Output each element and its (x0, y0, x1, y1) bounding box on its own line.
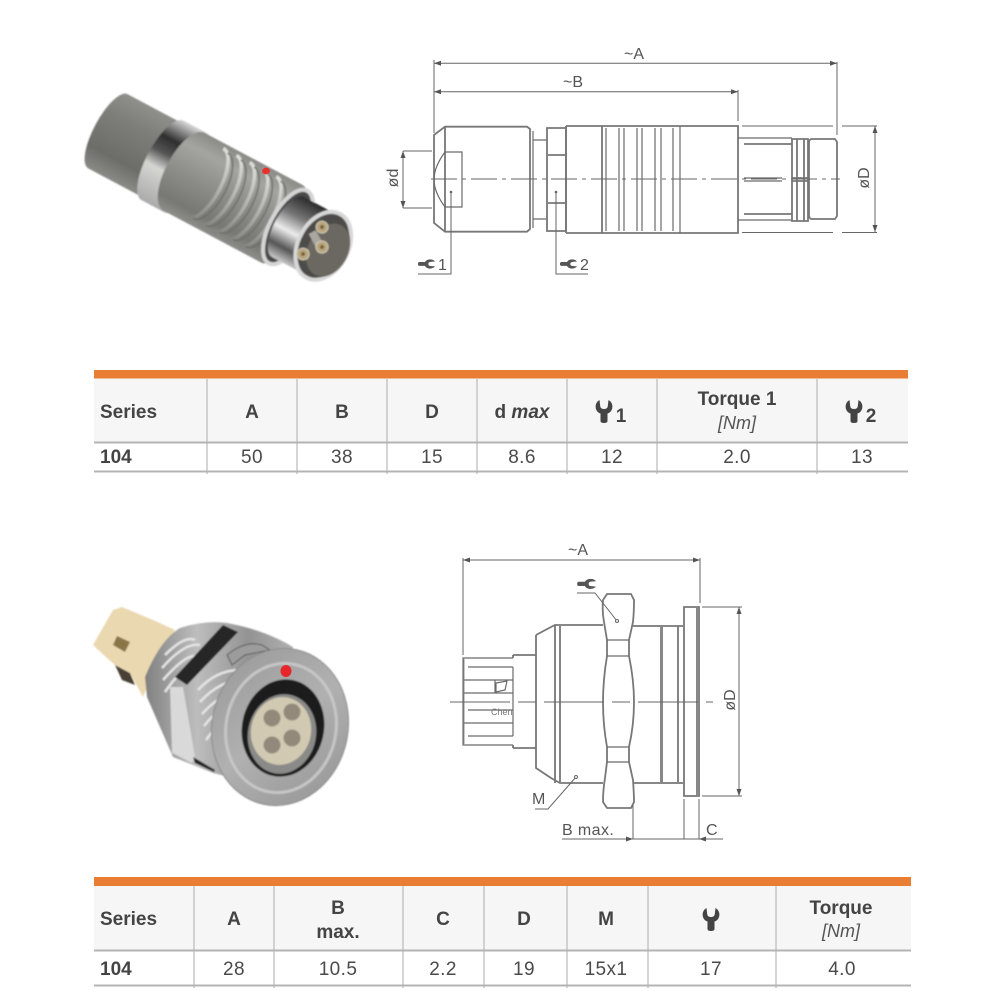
table 2 headers: B (331, 898, 345, 919)
table 2 values: 10.5 (319, 959, 357, 980)
dimension D (702, 607, 742, 796)
table 1 values: 104 (100, 447, 132, 468)
table 2 headers: A (227, 909, 241, 930)
front flange (197, 636, 363, 818)
table 1 headers: [Nm] (717, 413, 757, 433)
table 1 values: 12 (601, 447, 623, 468)
chrome neck (260, 190, 339, 276)
technical drawing: plug (385, 46, 878, 274)
front sleeve outline (434, 127, 530, 232)
lock slot (227, 644, 270, 665)
collet flat (434, 152, 462, 207)
dimension d (385, 151, 432, 208)
table 2 headers: Series (100, 909, 157, 930)
table 1 (94, 370, 908, 474)
cone (536, 625, 603, 783)
table 1 headers: d max (495, 402, 551, 423)
flange bevel (214, 653, 348, 803)
technical drawing: receptacle (450, 542, 742, 842)
table 2 headers (100, 898, 872, 943)
wrench callout (577, 579, 618, 622)
dimension D: øD (856, 167, 873, 189)
red index dot (262, 168, 270, 174)
neck (533, 131, 547, 228)
table 1 headers: B (335, 402, 349, 423)
table 1 headers: 2 (866, 406, 876, 427)
wrench callout 1: 1 (438, 257, 447, 274)
table 2 headers: Torque (810, 898, 872, 919)
table 1 values: 13 (851, 447, 873, 468)
dimension D (742, 126, 878, 232)
table 1 header background (94, 378, 908, 442)
table 2 values: 17 (700, 959, 722, 980)
flange (684, 607, 699, 796)
wrench callout 2: 2 (580, 257, 589, 274)
hex nut (547, 128, 566, 231)
dimension B (434, 74, 738, 121)
photo: cable plug connector (74, 85, 366, 297)
table 2 values (100, 959, 856, 980)
table 2 headers: D (517, 909, 531, 930)
table 2 headers: C (436, 909, 450, 930)
front face shell (284, 202, 362, 289)
table 2 headers: [Nm] (821, 921, 861, 941)
table 2 values: 28 (223, 959, 245, 980)
red index dot (280, 665, 292, 677)
thread highlights (162, 639, 245, 740)
thread callout M (532, 776, 578, 809)
hex nut (603, 594, 634, 808)
table 1 headers: Series (100, 402, 157, 423)
dimension A: ~A (624, 46, 644, 63)
table 2 values: 15x1 (585, 959, 627, 980)
receptacle opening (233, 672, 333, 784)
dimensions B max and C: C (706, 822, 718, 839)
dimension B: ~B (563, 74, 583, 91)
grooved sleeve (566, 126, 738, 233)
centre line (450, 701, 713, 703)
cable section (738, 138, 792, 220)
table 1 values: 38 (331, 447, 353, 468)
table 1 headers: 1 (616, 406, 627, 427)
dimension A (463, 542, 700, 655)
dimensions B max and C: B max. (562, 822, 614, 839)
table 1 headers: Torque 1 (698, 389, 777, 410)
photo: panel receptacle (93, 607, 363, 818)
connector pins (297, 216, 359, 284)
contact terminals (463, 658, 513, 745)
table 2 values: 19 (513, 959, 535, 980)
silver nut side (170, 687, 195, 763)
table 1 values: 15 (421, 447, 443, 468)
table 1 values: 2.0 (723, 447, 751, 468)
dimension D: øD (722, 689, 739, 711)
table 1 headers (100, 389, 876, 433)
table 2 (94, 877, 911, 988)
table 2 grid (194, 886, 776, 988)
table 2 values: 4.0 (828, 959, 856, 980)
grooved grip body (147, 124, 318, 271)
dimension A (434, 46, 837, 135)
table 1 values: 8.6 (508, 447, 536, 468)
rear cap (76, 88, 200, 207)
chrome front rim (253, 182, 323, 272)
cable clamp tail (809, 139, 837, 219)
rear step (513, 655, 536, 748)
table 1 values (100, 447, 873, 468)
dimension d: ød (385, 169, 402, 187)
table 2 values: 104 (100, 959, 132, 980)
table 1 orange rule (94, 370, 908, 378)
threaded shell (145, 622, 293, 790)
watermark: Chen (491, 707, 513, 717)
table 1 grid (207, 379, 817, 474)
table 2 headers: max. (316, 922, 360, 943)
wrench callout 2 (555, 191, 589, 274)
table 1 headers: A (245, 402, 259, 423)
centre line (431, 178, 840, 180)
ceramic insert (245, 692, 317, 770)
terminal slot (496, 681, 507, 692)
locking collar (792, 139, 808, 221)
table 2 values: 2.2 (429, 959, 457, 980)
table 2 orange rule (94, 877, 911, 886)
chrome ring (127, 113, 221, 220)
dimensions B max and C (562, 799, 723, 842)
socket holes (264, 704, 300, 754)
thread callout M: M (532, 791, 545, 808)
threaded body right (633, 626, 683, 783)
table 2 headers: M (598, 909, 614, 930)
black nut face (175, 625, 238, 685)
table 1 values: 50 (241, 447, 263, 468)
table 2 header background (94, 886, 911, 950)
wrench callout 1 (418, 191, 452, 274)
beige insulator tail (93, 607, 175, 697)
table 1 headers: D (425, 402, 439, 423)
dimension A: ~A (568, 542, 588, 559)
